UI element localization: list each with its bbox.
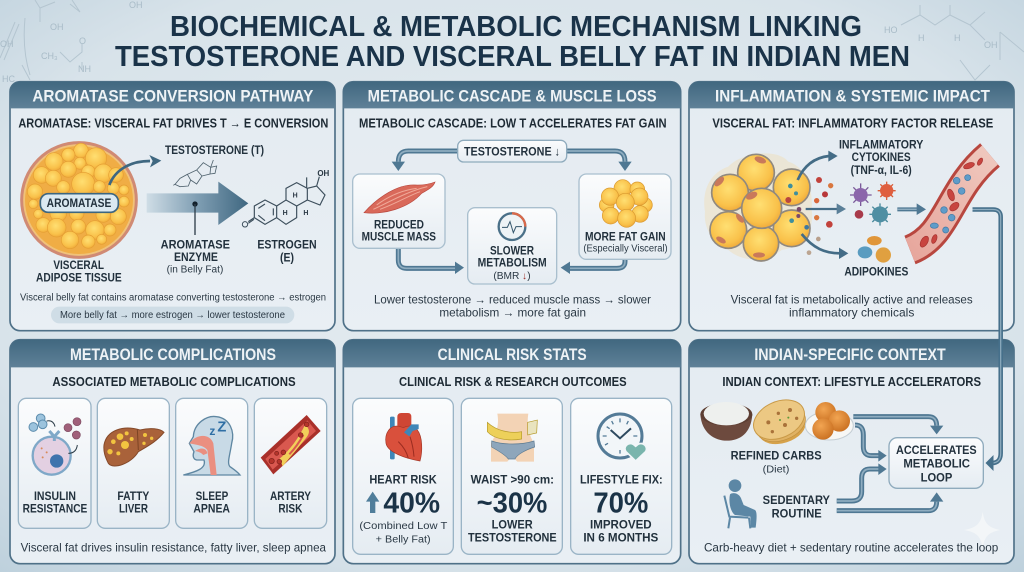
background molecule: top left [0,0,142,84]
card: reduced muscle mass: REDUCED [374,217,424,231]
caption: inflammation: Visceral fat is metabolically active and releases [731,293,973,306]
panel header: aromatase [10,82,335,108]
icon: liver [104,428,164,466]
panel: indian-specific context [689,340,1014,564]
caption: cascade: Lower testosterone → reduced muscle mass → slower [374,293,651,306]
icon: metabolism gauge [499,213,525,240]
label: aromatase enzyme: ENZYME [174,250,218,264]
icon: heart [386,413,422,461]
arrow: to particles [806,203,846,214]
background molecule: top left: OH [129,0,142,10]
card: heart risk: HEART RISK [369,473,437,487]
arrow: testosterone to muscle [392,151,458,171]
label: sedentary routine: SEDENTARY [763,493,830,507]
arrow: fat to metabolism [561,259,625,274]
card: slower metabolism: (BMR ↓) [493,271,531,282]
card: lifestyle fix: IN 6 MONTHS [583,531,658,545]
card: heart risk [353,398,453,554]
sparkle mark [964,512,1000,548]
arrow: routine to box side [837,463,887,501]
card: fatty liver: FATTY [117,489,149,503]
label: adipokines: ADIPOKINES [844,265,908,279]
label: sedentary routine: ROUTINE [772,507,822,521]
label: inflammatory cytokines: (TNF-α, IL-6) [851,163,912,177]
card: waist: WAIST >90 cm: [471,473,554,487]
label: sedentary routine [763,493,830,521]
card: fatty liver: LIVER [119,502,148,516]
box: accelerates metabolic loop [889,438,983,488]
label: aromatase enzyme: AROMATASE [161,237,230,251]
card: sleep apnea: SLEEP [196,489,228,503]
icon: up arrow [366,492,379,513]
icon: adipokines [858,236,891,263]
label: visceral adipose tissue: ADIPOSE TISSUE [36,271,122,285]
arrow: carbs to box side [855,425,887,462]
icon: fat cells [599,180,652,227]
icon: testosterone molecule [173,160,217,187]
icon: estrogen molecule: OH [317,169,330,178]
card: sleep apnea: APNEA [193,502,230,516]
takeaway pill: More belly fat → more estrogen → lower testosterone [60,310,285,321]
icon: clock and heart [598,414,646,461]
caption: cascade: metabolism → more fat gain [439,307,586,320]
label: visceral adipose tissue [36,258,122,285]
background molecule: top right: OH [984,40,998,50]
label: inflammatory cytokines: CYTOKINES [852,150,911,164]
card: insulin resistance: RESISTANCE [23,502,87,516]
panel header: indian context: INDIAN-SPECIFIC CONTEXT [754,345,946,364]
arrow: routine to box bottom [837,492,943,511]
subheading: aromatase: AROMATASE: VISCERAL FAT DRIVES T → E CONVERSION [18,116,328,131]
card: artery risk [254,398,327,528]
subheading: clinical: CLINICAL RISK & RESEARCH OUTCOMES [399,374,627,389]
card: lifestyle fix [571,398,672,554]
icon: seated person [724,479,757,528]
panel header: cascade: METABOLIC CASCADE & MUSCLE LOSS [368,87,657,106]
subheading: complications: ASSOCIATED METABOLIC COMPLICATIONS [52,374,296,389]
card: slower metabolism: SLOWER [490,243,534,257]
background molecule: top right [884,5,1024,80]
label: refined carbs: (Diet) [763,465,789,476]
arrow: carbs to box top [853,417,943,434]
panel header: complications: METABOLIC COMPLICATIONS [70,345,276,364]
icon: clogged artery [261,415,321,474]
background molecule: top left: HC [2,74,15,84]
icon: sleep apnea head: Z [217,420,226,436]
label: testosterone: TESTOSTERONE (T) [165,143,264,157]
card: lifestyle fix: LIFESTYLE FIX: [580,473,663,487]
icon: blood vessel [910,155,990,250]
card: slower metabolism [468,208,557,284]
box: accelerates metabolic loop: LOOP [921,471,952,485]
label pill: aromatase: AROMATASE [47,196,111,210]
card: more fat gain [579,174,671,259]
arrow: to cytokines [798,151,838,180]
panel: aromatase conversion pathway [10,82,335,331]
background molecule: top left: OH [0,39,14,49]
card: lifestyle fix: IMPROVED [590,517,652,531]
card: reduced muscle mass [353,174,445,248]
label: inflammatory cytokines [839,137,923,177]
icon: visceral fat tissue circle [22,143,136,257]
panel header: cascade [343,82,681,108]
enzyme marker [192,201,198,235]
arrow: to adipokines [802,234,848,259]
icon: insulin receptor cell [29,414,81,475]
caption: indian context: Carb-heavy diet + sedentary routine accelerates the loop [704,542,998,555]
icon: cytokine molecules [850,182,896,226]
label: inflammatory cytokines: INFLAMMATORY [839,137,923,151]
caption: cascade [374,293,651,320]
arrow: testosterone to fat [567,151,632,171]
card: more fat gain: (Especially Visceral) [583,244,668,255]
icon: muscle [364,182,435,213]
title: BIOCHEMICAL & METABOLIC MECHANISM LINKING [170,11,862,43]
label: visceral adipose tissue: VISCERAL [53,258,104,272]
card: waist [461,398,562,554]
icon: sleep apnea head [183,416,240,475]
label: refined carbs: REFINED CARBS [731,448,822,462]
background molecule: top right: H [954,33,960,43]
panel: clinical risk stats [343,340,681,564]
icon: waist and tape [487,414,537,462]
label: estrogen: (E) [280,251,294,265]
icon: estrogen molecule: H [303,210,308,217]
panel: metabolic complications [10,340,335,564]
card: slower metabolism: METABOLISM [478,256,547,270]
card: sleep apnea [176,398,248,528]
panel header: aromatase: AROMATASE CONVERSION PATHWAY [32,87,314,106]
card: heart risk: + Belly Fat) [376,534,431,545]
pill: testosterone down: TESTOSTERONE ↓ [464,144,560,158]
takeaway pill [51,307,294,323]
title [115,11,910,73]
caption: inflammation: inflammatory chemicals [789,307,915,320]
label: estrogen [257,237,317,265]
icon: rice bowl [700,402,752,441]
arrow: fat to testosterone [109,155,161,185]
panel: metabolic cascade [343,82,681,331]
caption: aromatase: Visceral belly fat contains aromatase converting testosterone → estrogen [20,293,326,304]
card: heart risk: 40% [383,487,440,519]
card: waist: LOWER [492,517,533,531]
background molecule: top left: CH₃ [41,51,58,61]
label: aromatase enzyme: (in Belly Fat) [167,265,223,276]
card: artery risk: RISK [278,502,303,516]
background molecule: top right: H [918,33,924,43]
panel header: complications [10,340,335,367]
icon: estrogen molecule: H [293,192,298,199]
panel: inflammation [689,82,1014,331]
background molecule: top left: OH [50,22,64,32]
card: more fat gain: MORE FAT GAIN [585,229,666,243]
card: fatty liver [97,398,169,528]
card: waist: TESTOSTERONE [468,531,557,545]
label: estrogen: ESTROGEN [257,237,317,251]
arrow: to blood vessel [897,203,926,215]
pill: testosterone down [458,140,567,162]
big conversion arrow [147,182,248,225]
panel header: clinical: CLINICAL RISK STATS [438,345,587,364]
icon: adipocyte cluster [704,153,812,261]
title: TESTOSTERONE AND VISCERAL BELLY FAT IN INDIAN MEN [115,41,910,73]
arrow: muscle to metabolism [398,248,464,274]
connector arrow: vessel to metabolic loop [972,210,1001,471]
inflammatory particles [807,177,833,255]
caption: complications: Visceral fat drives insulin resistance, fatty liver, sleep apnea [21,542,327,555]
box: accelerates metabolic loop: ACCELERATES [896,443,977,457]
caption: inflammation [731,293,973,320]
icon: estrogen molecule [242,169,330,227]
card: insulin resistance: INSULIN [34,489,76,503]
panel header: clinical [343,340,681,367]
card: reduced muscle mass: MUSCLE MASS [362,230,436,244]
panel header: inflammation: INFLAMMATION & SYSTEMIC IMPACT [715,87,991,106]
card: artery risk: ARTERY [270,489,311,503]
panel header: indian context [689,340,1014,367]
background molecule: top right: HO [884,25,898,35]
subheading: indian context: INDIAN CONTEXT: LIFESTYLE ACCELERATORS [722,374,981,389]
icon: estrogen molecule: H [283,210,288,217]
background molecule: top left: NH [78,64,91,74]
icon: naan [747,392,811,450]
card: lifestyle fix: 70% [593,487,648,519]
panel header: inflammation [689,82,1014,108]
label pill: aromatase [40,194,118,212]
label: refined carbs [731,448,822,476]
card: heart risk: (Combined Low T [359,521,447,532]
box: accelerates metabolic loop: METABOLIC [903,457,970,471]
subheading: cascade: METABOLIC CASCADE: LOW T ACCELERATES FAT GAIN [359,116,667,131]
icon: sleep apnea head: z [209,424,215,438]
icon: sweets plate [805,402,853,440]
background molecule: top left: O [79,36,86,46]
card: insulin resistance [18,398,91,528]
card: waist: ~30% [477,487,547,519]
label: aromatase enzyme [161,237,230,276]
